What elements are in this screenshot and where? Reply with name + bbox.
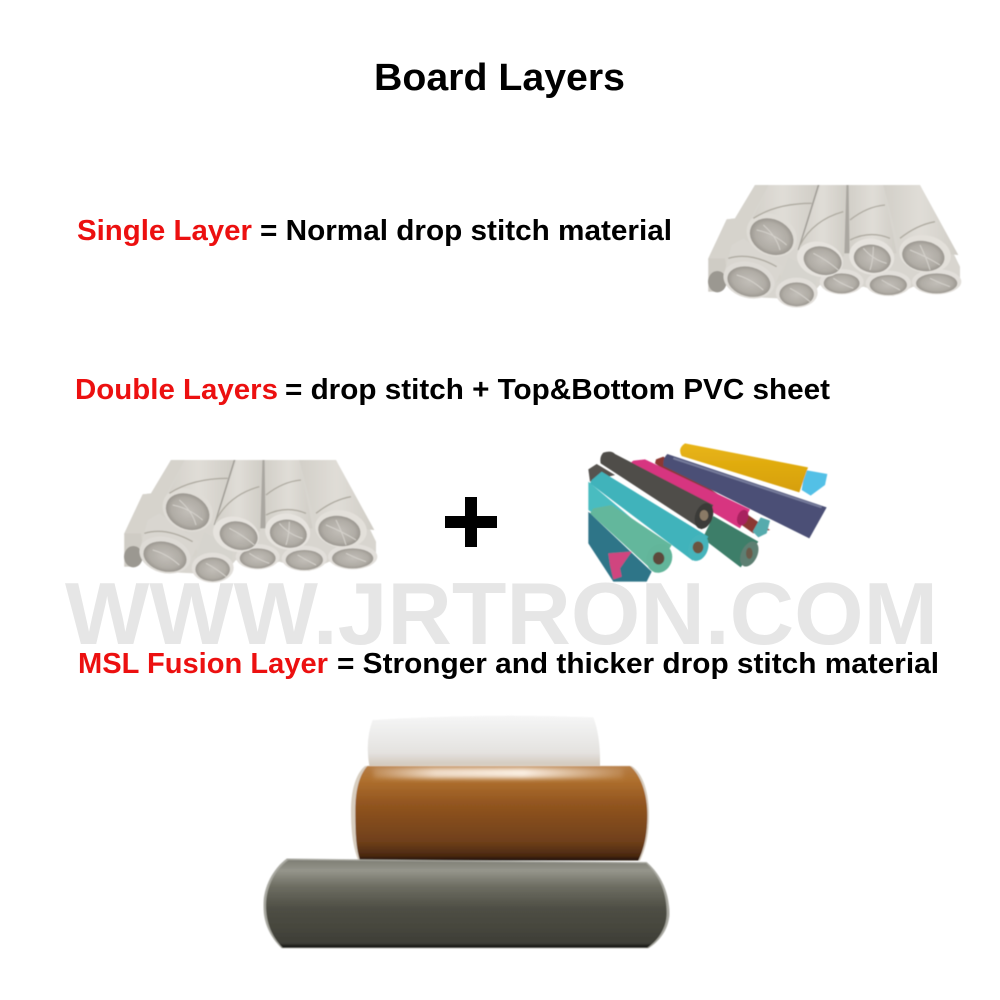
charcoal roll [600, 452, 713, 529]
blue roll with pink mark [588, 512, 652, 582]
dark green roll [703, 516, 758, 567]
image: drop stitch rolls, single layer [708, 185, 961, 308]
turquoise roll [590, 472, 708, 561]
image: fusion layer rolls stacked [263, 716, 669, 948]
title: Board Layers [374, 57, 625, 99]
single layer heading: = Normal drop stitch material [260, 215, 672, 247]
mint roll [590, 505, 672, 573]
double layers heading: Double Layers [75, 374, 278, 406]
MSL fusion layer heading [78, 648, 939, 680]
maroon roll stub [655, 457, 770, 533]
left teal sheet [588, 482, 653, 557]
grey roll [263, 859, 669, 948]
small teal roll [753, 517, 770, 537]
pink roll [630, 459, 750, 528]
image: coloured PVC sheet rolls [588, 443, 827, 582]
MSL fusion layer heading: = Stronger and thicker drop stitch material [337, 648, 939, 680]
white roll [368, 716, 600, 766]
watermark: WWW.JRTRON.COM [65, 564, 938, 663]
image: drop stitch rolls, double layers [124, 460, 377, 583]
light blue roll [802, 470, 827, 496]
brown roll [351, 766, 649, 861]
double layers heading: = drop stitch + Top&Bottom PVC sheet [285, 374, 830, 406]
icon: plus sign [445, 497, 497, 547]
single layer heading: Single Layer [77, 215, 252, 247]
navy roll [663, 454, 827, 538]
MSL fusion layer heading: MSL Fusion Layer [78, 648, 328, 680]
yellow roll [680, 443, 808, 492]
far-left dark roll [588, 464, 615, 482]
single layer heading [77, 215, 672, 247]
